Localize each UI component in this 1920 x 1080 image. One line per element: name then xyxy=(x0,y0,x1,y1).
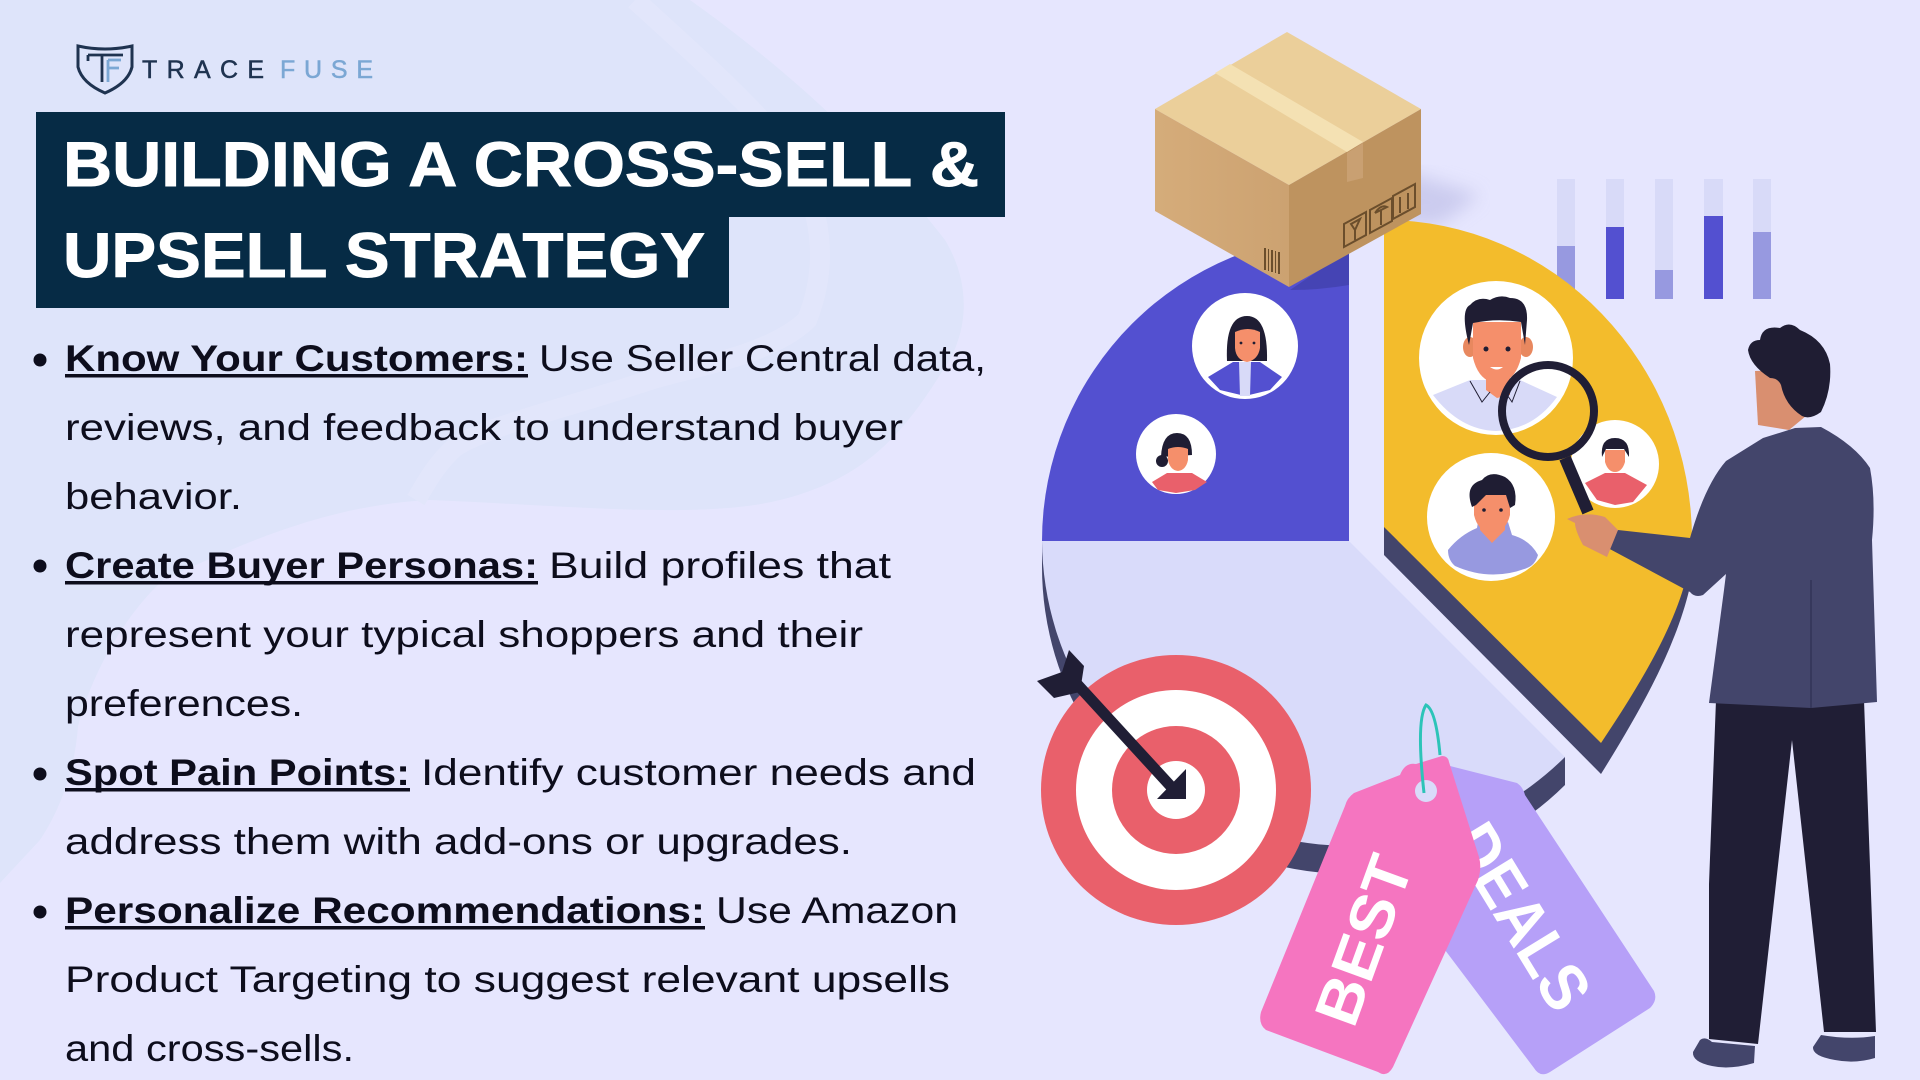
bullet: personalize recommendations: Personalize Recommendations: xyxy=(65,890,705,931)
bullet: spot pain points: Identify customer needs and xyxy=(421,752,976,793)
bullet: know your customers xyxy=(34,338,986,517)
icon: cardboard box xyxy=(1155,32,1421,287)
bullet: know your customers: behavior. xyxy=(65,476,242,517)
magnifying glass in hand xyxy=(1502,365,1618,557)
logo xyxy=(78,46,373,93)
bullet: create buyer personas: preferences. xyxy=(65,683,303,724)
pie chart xyxy=(1042,220,1697,874)
bullet: personalize recommendations: and cross-sells. xyxy=(65,1028,354,1069)
logo: FUSE xyxy=(280,56,373,84)
bullet: personalize recommendations: Product Targeting to suggest relevant upsells xyxy=(65,959,950,1000)
bullet: create buyer personas: Create Buyer Personas: xyxy=(65,545,538,586)
bullet: create buyer personas xyxy=(34,545,892,724)
avatar: man in shirt xyxy=(1419,281,1573,435)
box shadow xyxy=(1380,170,1480,225)
bullet: create buyer personas: Build profiles that xyxy=(549,545,892,586)
bullet: create buyer personas: represent your typical shoppers and their xyxy=(65,614,863,655)
title: UPSELL STRATEGY xyxy=(63,221,705,291)
title xyxy=(36,112,1005,308)
title: BUILDING A CROSS-SELL & xyxy=(63,130,979,200)
avatar: man in red shirt xyxy=(1571,420,1659,508)
price tags: BEST xyxy=(1302,846,1427,1035)
bullet: personalize recommendations: Use Amazon xyxy=(716,890,958,931)
bar chart xyxy=(1557,179,1771,299)
bullet: spot pain points: Spot Pain Points: xyxy=(65,752,410,793)
avatar: woman with bun xyxy=(1136,414,1216,494)
person viewing chart xyxy=(1606,324,1877,1067)
icon: target with arrow xyxy=(1037,650,1311,925)
bullet: know your customers: reviews, and feedback to understand buyer xyxy=(65,407,903,448)
price tags xyxy=(1260,705,1655,1074)
avatar: woman with jacket xyxy=(1192,293,1298,399)
bullet: know your customers: Use Seller Central data, xyxy=(539,338,986,379)
avatar: man in hoodie xyxy=(1427,453,1555,581)
bullet: personalize recommendations xyxy=(34,890,958,1069)
logo: TRACE xyxy=(142,56,264,84)
bullet: know your customers: Know Your Customers: xyxy=(65,338,528,379)
bullet: spot pain points: address them with add-ons or upgrades. xyxy=(65,821,852,862)
price tags: DEALS xyxy=(1436,810,1606,1023)
bullet: spot pain points xyxy=(34,752,976,862)
